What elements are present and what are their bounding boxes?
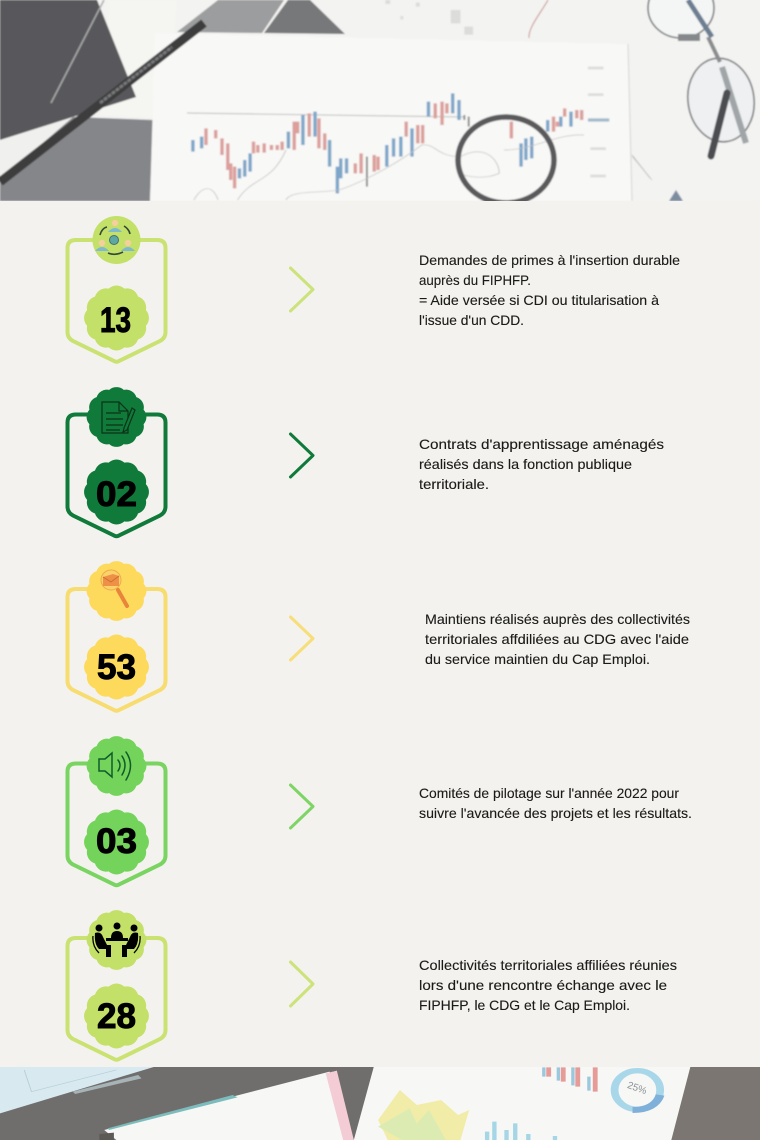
donut chart label: 25% [626,1080,648,1097]
text block 4 [419,785,692,821]
text block 2 [419,436,664,492]
icon: people exchanging in a cycle [92,216,140,264]
shield outline 3 [68,589,166,711]
text block 3: du service maintien du Cap Emploi. [425,651,650,667]
text block 3 [425,611,690,667]
number badge 28: 28 [97,997,136,1036]
text block 1: l'issue d'un CDD. [419,312,524,328]
arrow 5 [290,962,313,1006]
text block 2: territoriale. [419,476,489,492]
text block 4: suivre l'avancée des projets et les résultats. [419,805,692,821]
number badge 02 [84,460,149,524]
icon: loudspeaker [87,736,146,796]
text block 1: auprès du FIPHFP. [419,272,531,288]
icon: three people at a table [87,910,146,970]
number badge 53: 53 [97,648,136,687]
row 4: comites de pilotage [68,736,692,885]
row 1: insertion durable [68,216,680,362]
text block 1 [419,252,680,328]
arrow 4 [290,785,313,828]
text block 2: réalisés dans la fonction publique [419,456,632,472]
text block 3: territoriales affdiliées au CDG avec l'aide [425,631,689,647]
number badge 02: 02 [96,475,137,514]
shield outline 5 [68,938,166,1060]
shield outline 1 [68,240,166,362]
text block 2: Contrats d'apprentissage aménagés [419,436,664,452]
number badge 28 [84,984,149,1048]
text block 1: Demandes de primes à l'insertion durable [419,252,680,268]
shield outline 2 [68,414,166,536]
text block 5: FIPHFP, le CDG et le Cap Emploi. [419,997,630,1013]
shield outline 4 [68,764,166,885]
number badge 13: 13 [100,301,131,340]
footer photo: desk with printed charts [0,1060,760,1140]
number badge 13 [84,286,149,350]
row 2: contrats d'apprentissage [68,387,664,536]
text block 5: lors d'une rencontre échange avec le [419,977,667,993]
text block 3: Maintiens réalisés auprès des collectivités [425,611,690,627]
icon: document and pen [87,387,146,447]
icon: magnifier with envelope [87,561,146,621]
row 3: maintiens [68,561,690,711]
text block 5: Collectivités territoriales affiliées réunies [419,957,677,973]
text block 4: Comités de pilotage sur l'année 2022 pour [419,785,679,801]
text block 1: = Aide versée si CDI ou titularisation à [419,292,659,308]
text block 5 [419,957,677,1013]
row 5: collectivites reunies [68,910,677,1060]
arrow 3 [290,617,313,660]
number badge 03: 03 [96,822,137,861]
number badge 03 [84,810,149,874]
number badge 53 [84,635,149,699]
arrow 1 [290,268,313,311]
arrow 2 [290,434,313,477]
header photo: desk with charts and glasses [0,0,760,203]
